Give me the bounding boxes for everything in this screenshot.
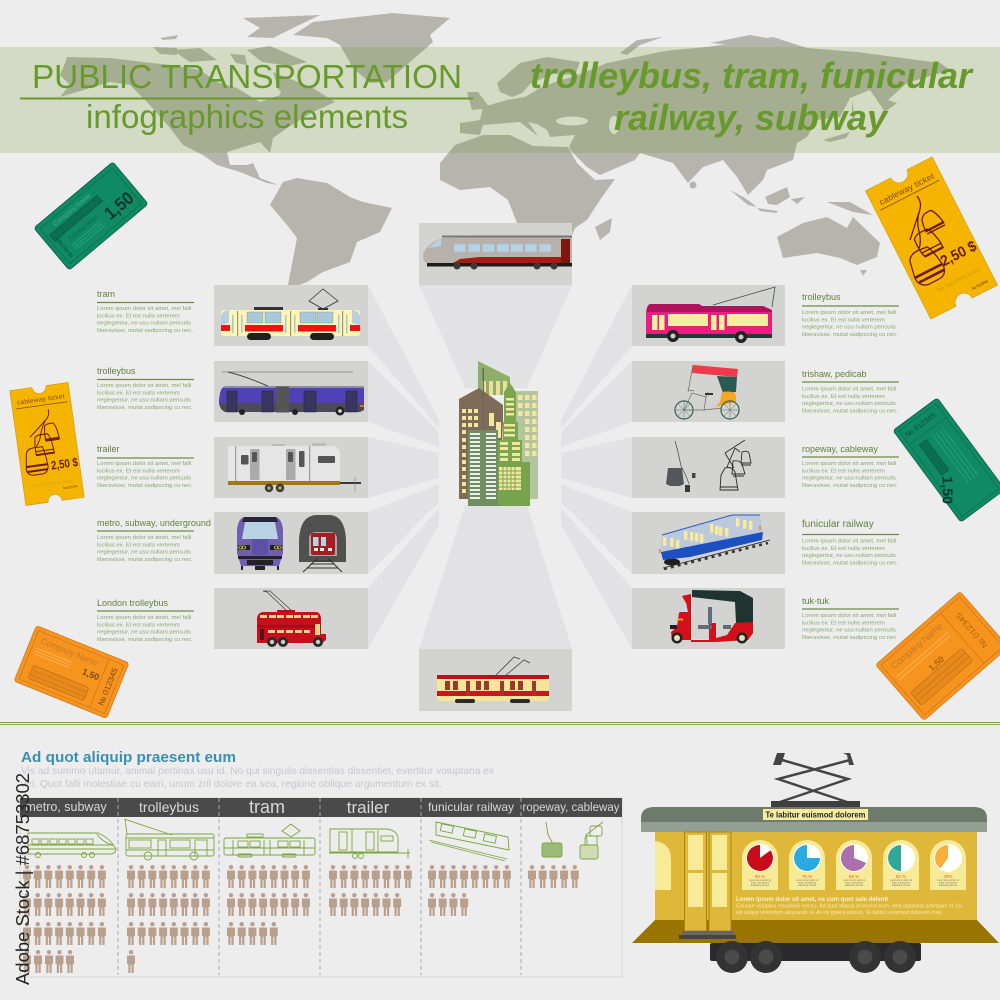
- text block: ropeway: ropeway, cableway: [802, 444, 878, 454]
- icon: outlined gondolas: [720, 440, 751, 490]
- pie window: 75%: [789, 840, 825, 890]
- big tram with pie charts: [632, 753, 999, 973]
- text block: trishaw: lucilius ex. Et est nulla verterem: [802, 394, 885, 400]
- text block: tram: liberavisse, mutat sadipscing cu nec.: [97, 328, 193, 334]
- icon: articulated trolleybus: [219, 372, 364, 416]
- panel: bottom tram: [419, 649, 572, 711]
- text block: tram: [97, 289, 194, 334]
- ticket: green top-left: Company Name: [52, 192, 93, 228]
- heading: Ad quot: Ad quot aliquip praesent eum: [21, 749, 236, 766]
- text block: trolleybus left: lucilius ex. Et est nulla verterem: [97, 390, 180, 396]
- text block: metro: [97, 518, 211, 563]
- icon: double-decker trolleybus: [257, 591, 326, 647]
- text block: tuk-tuk: liberavisse, mutat sadipscing cu nec.: [802, 635, 898, 641]
- text block: trolleybus left: Lorem ipsum dolor sit amet, mel falli: [97, 383, 191, 389]
- ticket: green top-left: [34, 162, 148, 270]
- text block: tram: neglegentur, ne usu nullam periculis: [97, 321, 191, 327]
- pie window: 85%: Lorem ipsum dolor sit: [749, 879, 771, 882]
- ticket: orange left: № 012345: [96, 666, 120, 707]
- icon: gondolas outline: [542, 822, 603, 859]
- pie window: 75%: 75 %: [802, 874, 812, 879]
- ticket: green right: [887, 398, 1000, 527]
- title: public transportation: infographics elements: [86, 98, 408, 135]
- ticket: green right: № 012345: [904, 412, 938, 439]
- text block: funicular: funicular railway: [802, 519, 874, 530]
- pie window: 85%: adipiscing elit sed: [751, 884, 770, 887]
- text block: intro: vel. Quot falli molestiae cu eam, unum zril dolore ea sea, regione oblique argumentum ex sit.: [21, 778, 442, 790]
- text block: trishaw: Lorem ipsum dolor sit amet, mel falli: [802, 386, 896, 392]
- title: public transportation: [20, 58, 473, 135]
- inland seas: [249, 88, 619, 134]
- text block: metro: metro, subway, underground: [97, 518, 211, 528]
- column headers: tram: [249, 797, 285, 817]
- text block: trolleybus right: trolleybus: [802, 292, 841, 302]
- ticket: orange left: Company Name: [39, 636, 100, 668]
- text block: trailer: lucilius ex. Et est nulla verterem: [97, 468, 180, 474]
- text block: trolleybus left: [97, 366, 194, 411]
- text block: intro: [21, 765, 495, 790]
- table: ridership by transport type: [20, 797, 622, 977]
- icon: tram outline: [224, 824, 315, 857]
- text block: trolleybus left: trolleybus: [97, 366, 136, 376]
- text block: trailer: trailer: [97, 444, 120, 454]
- text block: tram: lucilius ex. Et est nulla verterem: [97, 313, 180, 319]
- panel: metro: [214, 512, 368, 574]
- pantograph: [771, 753, 860, 807]
- text block: London trolleybus: London trolleybus: [97, 598, 169, 608]
- tram caption: Lorem ipsum dolor sit amet, ne cum quot sale delenit: [736, 897, 888, 903]
- text block: trolleybus right: liberavisse, mutat sadipscing cu nec.: [802, 332, 898, 338]
- ticket: orange left: 1,50: [81, 666, 101, 682]
- pie window: 50%: [883, 840, 919, 890]
- text block: London trolleybus: lucilius ex. Et est nulla verterem: [97, 622, 180, 628]
- text block: tuk-tuk: lucilius ex. Et est nulla verterem: [802, 620, 885, 626]
- ticket: yellow top-right: 2,50 $: [938, 237, 980, 270]
- tram caption: Causae voluptua repudiare est eu. Ad quot aliquip praesent eum, velit appareat antiopam et vix,: [736, 904, 963, 910]
- panel: London trolleybus: [214, 588, 368, 649]
- column headers: trolleybus: [139, 799, 199, 815]
- text block: ropeway: liberavisse, mutat sadipscing cu nec.: [802, 483, 898, 489]
- pie window: 69%: Lorem ipsum dolor sit: [843, 879, 865, 882]
- text block: trishaw: neglegentur, ne usu nullam periculis: [802, 401, 896, 407]
- icon: metro tunnel: [299, 515, 346, 572]
- panel: trishaw: [632, 361, 785, 422]
- ticket: yellow left: cableway ticket: [17, 393, 65, 407]
- pictogram rows: [23, 865, 579, 973]
- ticket: orange right: № 012345: [954, 610, 990, 650]
- text block: trolleybus left: neglegentur, ne usu nullam periculis: [97, 398, 191, 404]
- pie window: 75%: Lorem ipsum dolor sit: [796, 879, 818, 882]
- text block: trishaw: [802, 369, 899, 414]
- pie window: 40%: 40%: [943, 874, 953, 879]
- icon: funicular outline: [429, 822, 509, 861]
- subtitle: transport types: [530, 55, 974, 138]
- ticket: orange right: [875, 591, 1000, 721]
- ticket: green top-left: 1,50: [100, 188, 138, 224]
- icon: pink trolleybus: [646, 287, 775, 343]
- ticket: green right: 1,50: [938, 476, 955, 504]
- text block: funicular: [802, 519, 899, 566]
- text block: ropeway: lucilius ex. Et est nulla verterem: [802, 468, 885, 474]
- ticket: yellow top-right: the round-trip ticket: [936, 267, 981, 294]
- doors: [679, 832, 736, 939]
- text block: metro: liberavisse, mutat sadipscing cu nec.: [97, 557, 193, 563]
- panel: trolleybus (right): [632, 285, 785, 346]
- text block: ropeway: neglegentur, ne usu nullam periculis: [802, 476, 896, 482]
- text block: trailer: liberavisse, mutat sadipscing cu nec.: [97, 483, 193, 489]
- ticket: yellow top-right: [865, 157, 998, 319]
- ticket: green top-left: Subway ticket: [68, 214, 100, 243]
- text block: trolleybus right: neglegentur, ne usu nullam periculis: [802, 325, 896, 331]
- pie window: 85%: [742, 840, 778, 890]
- section divider: [0, 722, 1000, 725]
- text block: funicular: neglegentur, ne usu nullam periculis: [802, 553, 896, 559]
- column headers: funicular railway: [428, 800, 514, 814]
- column headers: ropeway, cableway: [523, 802, 620, 814]
- text block: tram: tram: [97, 289, 115, 299]
- text block: metro: neglegentur, ne usu nullam periculis: [97, 550, 191, 556]
- ticket: yellow top-right: № 012345: [971, 279, 989, 291]
- column headers: metro, subway: [25, 800, 107, 814]
- pie window: 50%: Lorem ipsum dolor sit: [890, 879, 912, 882]
- ticket: yellow left: № 012345: [63, 484, 78, 490]
- pie window: 50%: 50 %: [896, 874, 906, 879]
- text block: trolleybus right: [802, 292, 899, 338]
- icon: subway outline: [28, 833, 116, 858]
- pie window: 40%: adipiscing elit sed: [939, 884, 958, 887]
- text block: ropeway: [802, 444, 899, 489]
- text block: tram: Lorem ipsum dolor sit amet, mel falli: [97, 306, 191, 312]
- text block: London trolleybus: liberavisse, mutat sadipscing cu nec.: [97, 637, 193, 643]
- text block: funicular: Lorem ipsum dolor sit amet, mel falli: [802, 538, 896, 544]
- text block: London trolleybus: [97, 598, 194, 643]
- text block: trolleybus left: liberavisse, mutat sadipscing cu nec.: [97, 405, 193, 411]
- icon: tram: [221, 289, 360, 340]
- icon: pedicab: [675, 365, 739, 419]
- pie window: 69%: adipiscing elit sed: [845, 884, 864, 887]
- panel: top express train: [419, 223, 572, 285]
- panel: trailer: [214, 437, 368, 498]
- panel: ropeway: [632, 437, 785, 498]
- pie window: 85%: 85 %: [755, 874, 765, 879]
- pie window: 50%: amet, consectetur: [892, 882, 910, 884]
- panel: trolleybus (left): [214, 361, 368, 422]
- text block: trailer: neglegentur, ne usu nullam periculis: [97, 476, 191, 482]
- ticket: yellow top-right: cableway ticket: [878, 171, 936, 207]
- ticket: yellow left: 2,50 $: [50, 455, 79, 473]
- rays from city to panels: [368, 285, 632, 649]
- pie window: 85%: amet, consectetur: [751, 882, 769, 884]
- ticket: orange right: 1,50: [926, 654, 946, 673]
- ticket: yellow left: the round-trip ticket: [33, 478, 73, 488]
- icon: funicular car: [659, 515, 770, 569]
- ticket: yellow left: [10, 382, 84, 506]
- text block: ropeway: Lorem ipsum dolor sit amet, mel falli: [802, 461, 896, 467]
- pie window: 40%: [930, 840, 966, 890]
- panel: tuk-tuk: [632, 588, 785, 649]
- icon: trailer: [228, 443, 361, 492]
- text block: trishaw: liberavisse, mutat sadipscing cu nec.: [802, 408, 898, 414]
- text block: metro: lucilius ex. Et est nulla verterem: [97, 542, 180, 548]
- vertical stock image label: Adobe Stock | #68753302: [13, 773, 33, 985]
- text block: trolleybus right: Lorem ipsum dolor sit amet, mel falli: [802, 310, 896, 316]
- subtitle: transport types: trolleybus, tram, funicular: [530, 55, 974, 96]
- pie window: 69%: 69 %: [849, 874, 859, 879]
- subtitle: transport types: railway, subway: [614, 97, 889, 138]
- text block: trailer: [97, 444, 194, 489]
- text block: intro: Vis ad summo utamur, animal pertinax usu id. No qui singulis dissentias dissentiet, evertitur voluptaria ex: [21, 765, 495, 777]
- text block: trishaw: trishaw, pedicab: [802, 369, 867, 379]
- panel: funicular: [632, 512, 785, 574]
- pie window: 50%: adipiscing elit sed: [892, 884, 911, 887]
- world map: [60, 13, 950, 290]
- tram caption: [736, 897, 963, 916]
- text block: tuk-tuk: Lorem ipsum dolor sit amet, mel falli: [802, 613, 896, 619]
- pie window: 75%: adipiscing elit sed: [798, 884, 817, 887]
- text block: London trolleybus: Lorem ipsum dolor sit amet, mel falli: [97, 615, 191, 621]
- column headers: trailer: [347, 798, 390, 817]
- column headers: [25, 797, 620, 817]
- text block: London trolleybus: neglegentur, ne usu nullam periculis: [97, 630, 191, 636]
- icon: dark gondola: [666, 441, 696, 492]
- text block: trolleybus right: lucilius ex. Et est nulla verterem: [802, 317, 885, 323]
- ticket: orange left: [14, 625, 129, 719]
- icon: metro front: [237, 517, 283, 570]
- text block: metro: Lorem ipsum dolor sit amet, mel falli: [97, 535, 191, 541]
- chassis and wheels: [710, 941, 921, 973]
- text block: funicular: liberavisse, mutat sadipscing cu nec.: [802, 560, 898, 566]
- text block: funicular: lucilius ex. Et est nulla verterem: [802, 546, 885, 552]
- icon: tuk-tuk: [670, 590, 753, 644]
- panel: tram: [214, 285, 368, 346]
- roof label: Te labitur euismod dolorem: [766, 810, 866, 820]
- text block: tuk-tuk: [802, 596, 899, 641]
- pie window: 40%: Lorem ipsum dolor sit: [937, 879, 959, 882]
- icon: trolleybus outline: [124, 819, 214, 860]
- header band: [0, 47, 1000, 153]
- text block: trailer: Lorem ipsum dolor sit amet, mel falli: [97, 461, 191, 467]
- tram caption: vis aeque vivendum aliquando ei. At vix graeci epicuri. Te labitur euismod dolorem mea.: [736, 910, 943, 916]
- text block: tuk-tuk: tuk-tuk: [802, 596, 830, 606]
- pie window: 69%: [836, 840, 872, 890]
- pie window: 69%: amet, consectetur: [845, 882, 863, 884]
- icon: trailer outline: [329, 829, 410, 858]
- ticket: orange right: Company Name: [889, 621, 945, 672]
- pie window: 75%: amet, consectetur: [798, 882, 816, 884]
- pie window: 40%: amet, consectetur: [939, 882, 957, 884]
- text block: tuk-tuk: neglegentur, ne usu nullam periculis: [802, 628, 896, 634]
- title: public transportation: PUBLIC TRANSPORTATION: [32, 58, 462, 95]
- ticket: green top-left: № 012345: [55, 236, 75, 258]
- city buildings: [459, 361, 538, 506]
